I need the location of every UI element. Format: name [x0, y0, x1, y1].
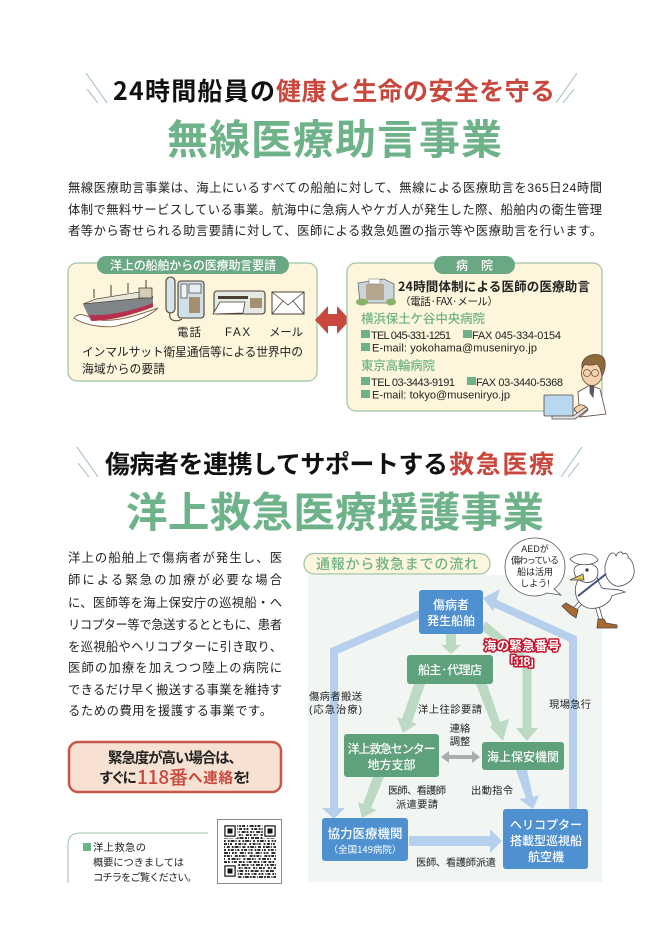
- text: Yokohama hospital: E-mail: yokohama@museniryo.jp: [372, 342, 537, 354]
- text block: inmarsat: インマルサット衛星通信等による世界中の: [82, 345, 303, 359]
- heading: section 2 tagline: 傷病者を連携してサポートする: [105, 445, 448, 481]
- arrow: emergency number line: [483, 625, 538, 741]
- labels: flow steps: 現場急行: [549, 698, 591, 711]
- box: ship: [419, 590, 483, 634]
- labels: flow steps: 調整: [450, 735, 470, 748]
- icon: hospital building: [356, 279, 396, 306]
- arrow: ship to owner: [441, 634, 461, 654]
- text block: details link: [68, 833, 208, 884]
- text block: section 2 description: に、医師等を海上保安庁の巡視船・ヘ: [68, 595, 282, 610]
- illustration: doctor at laptop: [544, 354, 606, 419]
- text block: section 1 intro: [68, 180, 602, 238]
- labels: flow steps: 医師、看護師派遣: [416, 856, 496, 869]
- text block: details link: 洋上救急の: [93, 841, 146, 854]
- box: coast guard: 海上保安機関: [487, 748, 559, 765]
- text block: section 1 intro: 無線医療助言事業は、海上にいるすべての船舶に対して、無線による医療助言を365日24時間: [68, 180, 602, 195]
- heading: section 2 tagline: 救急医療: [449, 445, 554, 481]
- text: 24-hour advice: 24時間体制による医師の医療助言: [398, 276, 590, 295]
- callout: call 118: 118番: [137, 763, 188, 790]
- text block: inmarsat: [82, 345, 303, 376]
- icon: mail: [272, 292, 304, 314]
- arrow: rush to the scene: [483, 589, 573, 810]
- labels: flow steps: 洋上往診要請: [418, 703, 482, 716]
- box: medical institution: [322, 818, 408, 861]
- labels: flow steps: 出動指令: [471, 784, 513, 797]
- arrow: coordination: [441, 751, 480, 763]
- illustration: seagull mascot: [562, 552, 634, 628]
- box: owner: [407, 655, 493, 684]
- text: Yokohama hospital: 横浜保土ケ谷中央病院: [361, 308, 485, 327]
- box: medical institution: （全国149病院）: [329, 842, 401, 856]
- callout: call 118: [69, 742, 281, 792]
- arrow: coast guard to helicopter: [516, 770, 539, 809]
- box: helicopter vessel: ヘリコプター: [510, 816, 582, 833]
- label: emergency number 118: 海の緊急番号: [484, 638, 560, 653]
- box: helicopter vessel: [503, 809, 588, 869]
- text: Tokyo hospital: E-mail: tokyo@museniryo.jp: [372, 390, 510, 402]
- arrow: two-way red: [315, 306, 350, 334]
- text: Tokyo hospital: FAX 03-3440-5368: [476, 377, 563, 389]
- arrow: patient transport: [322, 614, 420, 819]
- box: owner: 船主·代理店: [418, 661, 482, 678]
- text block: section 1 intro: 者等から寄せられる助言要請に対して、医師による救急処置の指示等や医療助言を行います。: [68, 223, 602, 238]
- label: emergency number 118: 「118」: [503, 655, 541, 669]
- title: section 1: 無線医療助言事業: [167, 106, 502, 166]
- callout: AED speech bubble: [505, 538, 565, 596]
- text block: section 2 description: リコプター等で急送するとともに、患者: [68, 617, 282, 632]
- text block: section 2 description: 師による緊急の加療が必要な場合: [68, 572, 282, 587]
- callout: call 118: 緊急度が高い場合は、: [108, 747, 243, 768]
- icon: ship: [74, 280, 158, 327]
- labels: contact methods: FAX: [225, 327, 250, 339]
- text: Tokyo hospital: [361, 355, 563, 402]
- callout: call 118: を!: [233, 767, 250, 788]
- labels: contact methods: [177, 326, 303, 339]
- panel heading: hospitals: [434, 256, 515, 274]
- heading pill: flow: 通報から救急までの流れ: [316, 554, 478, 574]
- panel: flow diagram: [308, 575, 602, 882]
- callout: call 118: すぐに: [99, 767, 137, 788]
- callout: call 118: へ連絡: [188, 767, 234, 788]
- arrow: owner to coast guard: [476, 684, 509, 741]
- box: rescue centre: 地方支部: [367, 756, 416, 773]
- labels: flow steps: (応急治療): [309, 703, 362, 716]
- text block: section 2 description: 洋上の船舶上で傷病者が発生し、医: [68, 550, 282, 565]
- box: rescue centre: [344, 734, 439, 777]
- panel heading: requests from ships: 洋上の船舶からの医療助言要請: [110, 256, 276, 274]
- panel heading: hospitals: 病 院: [456, 256, 493, 274]
- labels: flow steps: [309, 690, 591, 869]
- heading: section 1 tagline: 24時間船員の: [113, 72, 275, 108]
- box: rescue centre: 洋上救急センター: [348, 740, 436, 757]
- labels: flow steps: 連絡: [450, 722, 471, 735]
- icon: fax: [213, 291, 265, 314]
- icon: telephone: [166, 277, 204, 321]
- box: ship: 傷病者: [433, 596, 469, 613]
- text block: details link: 概要につきましては: [93, 856, 184, 869]
- text: Yokohama hospital: [361, 308, 561, 354]
- text block: section 1 intro: 体制で無料サービスしている事業。航海中に急病人やケガ人が発生した際、船舶内の衛生管理: [68, 202, 602, 217]
- label: emergency number 118: [484, 638, 560, 669]
- panel: requests from ships: [68, 256, 317, 381]
- labels: flow steps: 派遣要請: [396, 798, 438, 811]
- heading: section 1 tagline: [86, 72, 577, 108]
- callout: AED speech bubble: AEDが: [521, 543, 549, 554]
- text block: details link: コチラをご覧ください。: [93, 871, 197, 884]
- text: Tokyo hospital: 東京高輪病院: [361, 355, 435, 374]
- text block: section 2 description: を巡視船やヘリコプターに引き取り、: [68, 640, 282, 654]
- arrow: owner to rescue centre: [397, 684, 425, 733]
- text block: section 2 description: るための費用を援護する事業です。: [68, 703, 272, 718]
- labels: contact methods: メール: [269, 327, 303, 339]
- QR code: [218, 820, 282, 884]
- box: helicopter vessel: 搭載型巡視船: [510, 832, 582, 849]
- text: Yokohama hospital: TEL 045-331-1251: [371, 330, 451, 342]
- callout: AED speech bubble: しよう!: [520, 578, 550, 588]
- heading: section 2 tagline: [77, 445, 582, 481]
- arrow: doctor dispatch: [409, 829, 502, 853]
- labels: flow steps: 傷病者搬送: [309, 690, 362, 703]
- title: section 2: 洋上救急医療援護事業: [126, 479, 544, 539]
- panel: hospitals: [347, 256, 606, 419]
- text: contact means: （電話·FAX·メール）: [400, 294, 498, 309]
- labels: flow steps: 医師、看護師: [388, 784, 446, 797]
- callout: AED speech bubble: 船は活用: [517, 566, 553, 577]
- arrow: centre to medical institution: [358, 777, 384, 818]
- box: medical institution: 協力医療機関: [327, 823, 403, 842]
- box: coast guard: [482, 742, 564, 770]
- heading: section 1 tagline: 健康と生命の安全を守る: [276, 72, 555, 108]
- labels: contact methods: 電話: [177, 326, 202, 339]
- text: Tokyo hospital: TEL 03-3443-9191: [371, 377, 455, 389]
- box: helicopter vessel: 航空機: [528, 848, 564, 865]
- text block: inmarsat: 海域からの要請: [82, 362, 165, 376]
- text block: section 2 description: できるだけ早く搬送する事業を維持す: [68, 682, 282, 697]
- callout: AED speech bubble: 備わっている: [511, 554, 559, 566]
- text block: section 2 description: [68, 550, 282, 718]
- box: ship: 発生船舶: [427, 612, 475, 629]
- text: Yokohama hospital: FAX 045-334-0154: [472, 330, 561, 342]
- text block: section 2 description: 医師の加療を加えつつ陸上の病院に: [68, 661, 282, 675]
